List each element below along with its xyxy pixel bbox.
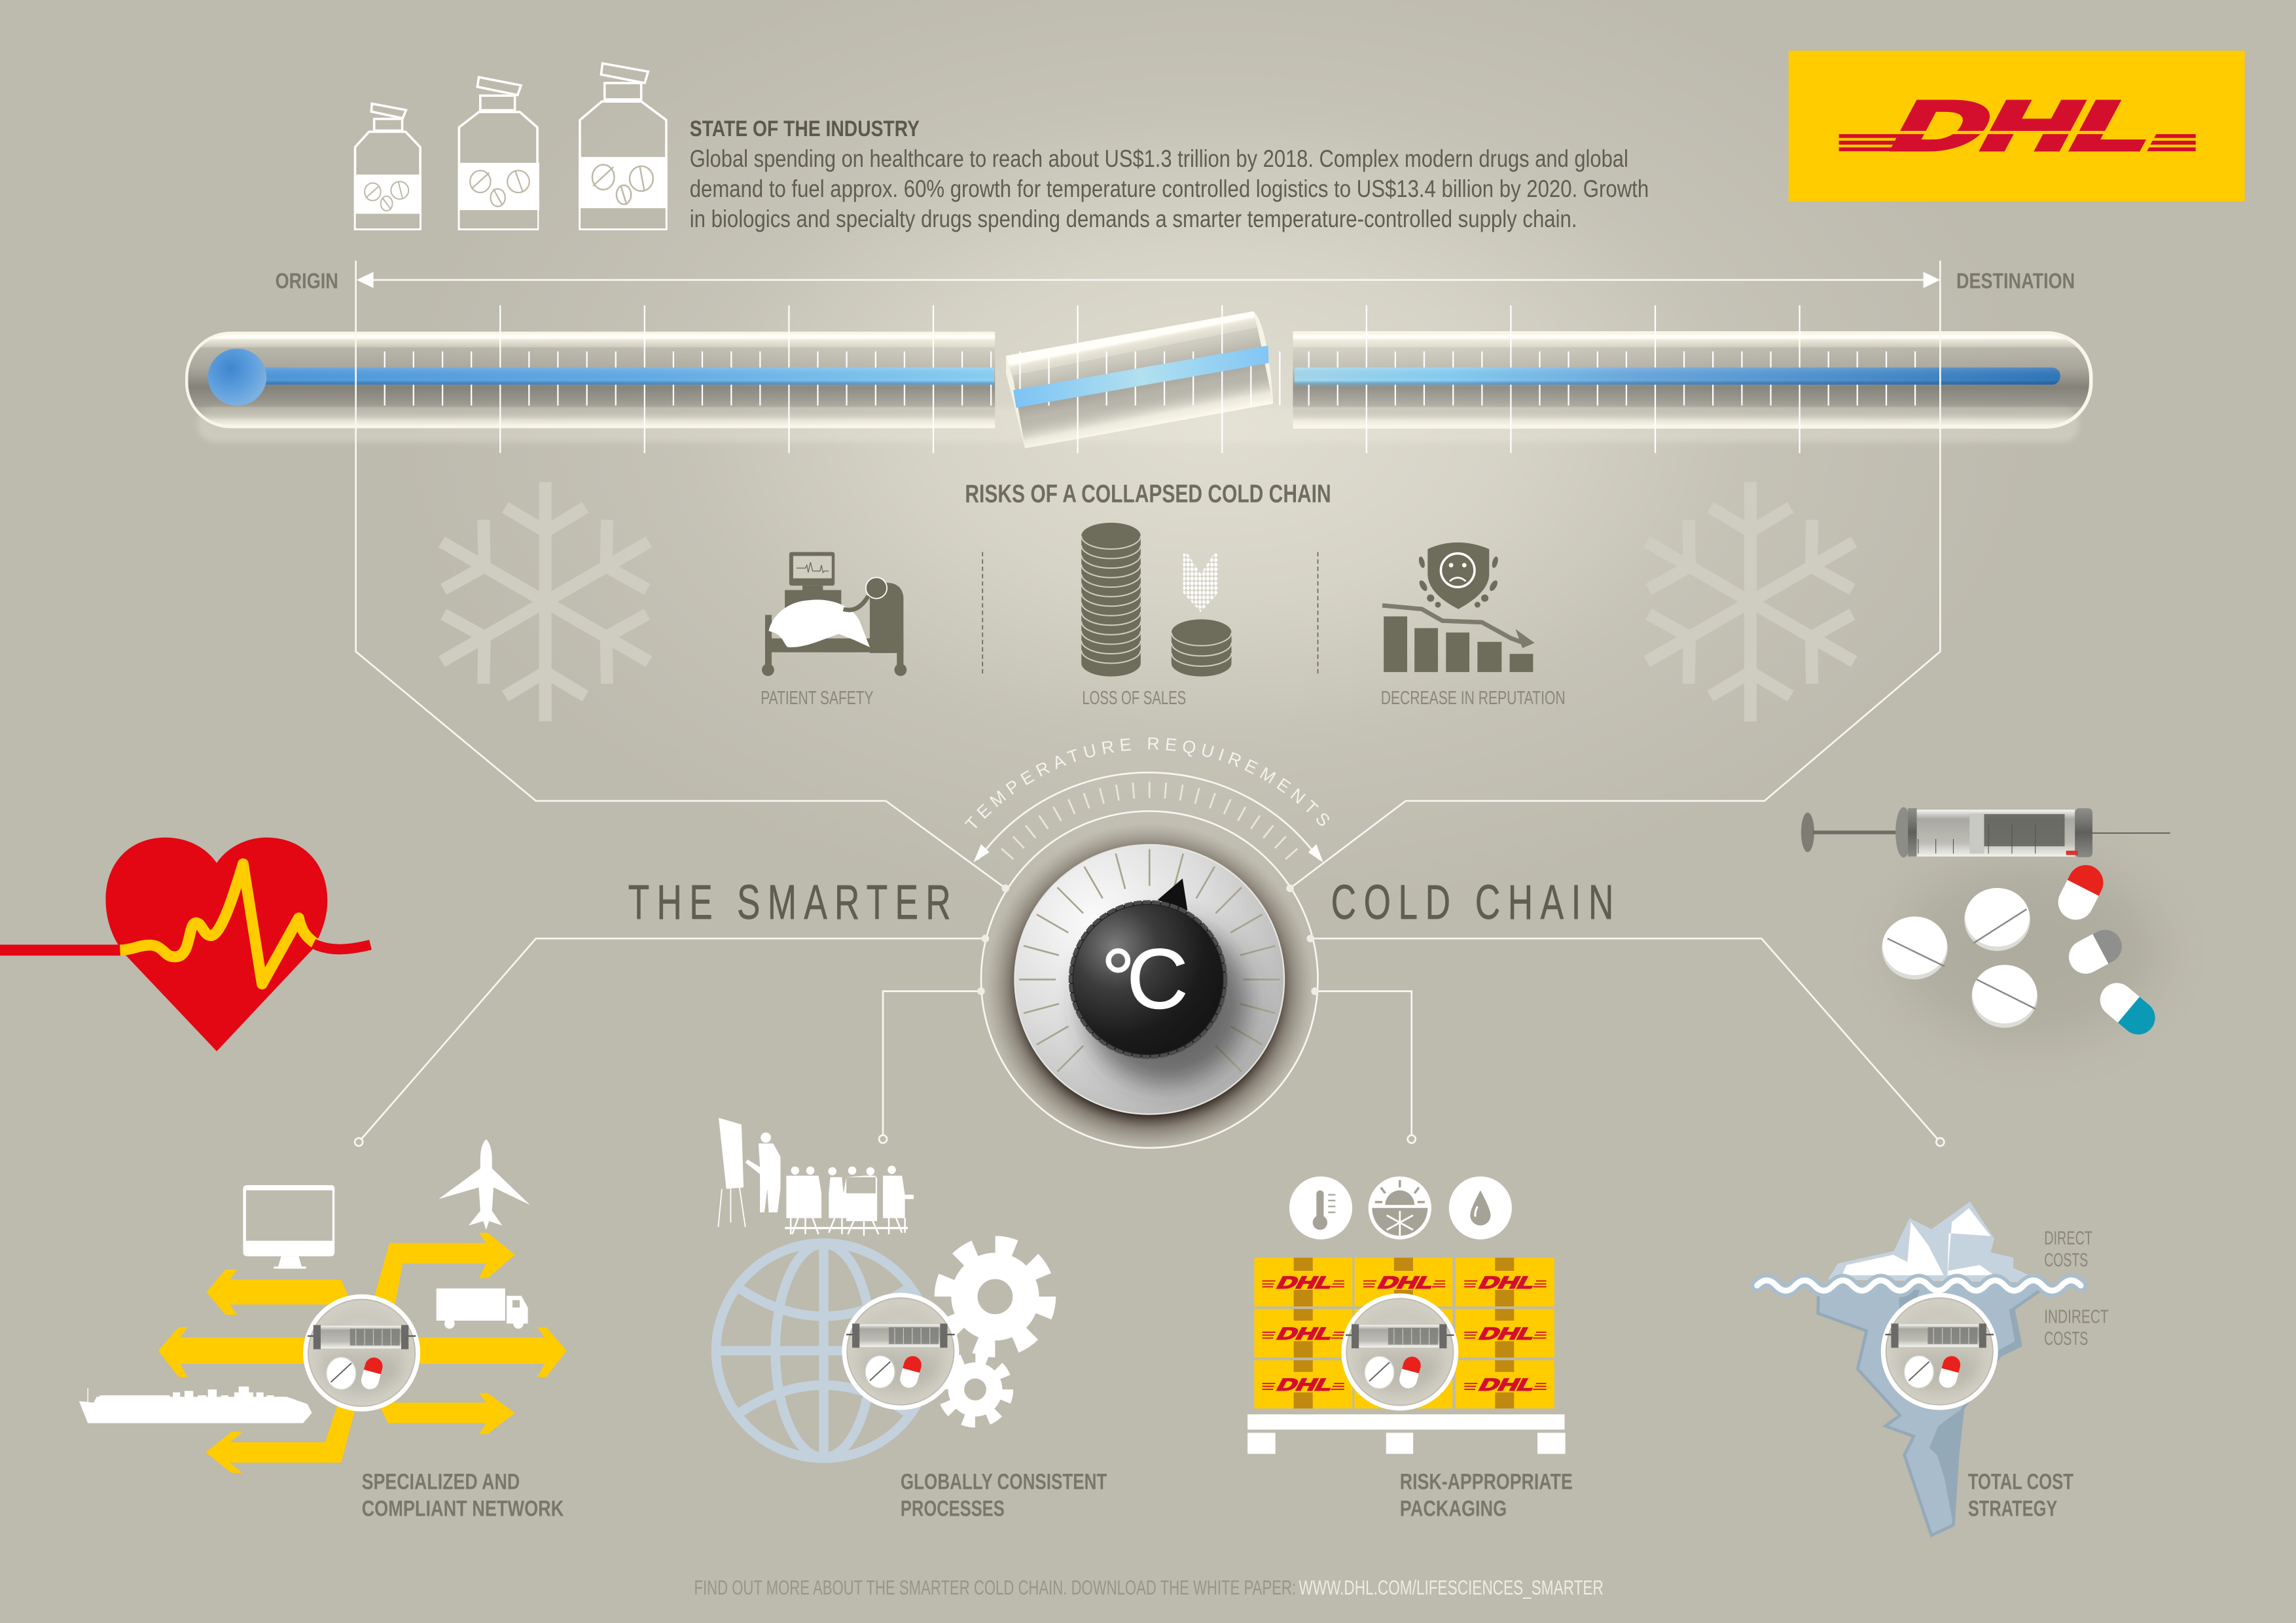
arc text: temperature requirements: TEMPERATURE REQUIREMENTS [965,737,1329,829]
box logos: DHL [1274,1324,1338,1343]
body text: in biologics and specialty drugs spending demands a smarter temperature-controlled supply chain. [690,205,1577,232]
iceberg below water [1818,1285,2047,1535]
label: indirect costs: COSTS [2044,1329,2088,1349]
illustration: syringe and pills [1801,807,2170,1043]
scale ticks [385,305,1915,453]
badge [842,1293,959,1410]
panel: globally consistent processes [716,1118,1107,1522]
body text [690,145,1649,232]
label: risk-appropriate packaging: RISK-APPROPRIATE [1400,1469,1573,1494]
title: cold chain: COLD CHAIN [1331,875,1613,929]
short coin stack [1172,619,1232,677]
footer: FIND OUT MORE ABOUT THE SMARTER COLD CHAIN. DOWNLOAD THE WHITE PAPER: [694,1576,1296,1599]
dial disc [1014,845,1284,1115]
box logos: DHL [1274,1375,1338,1394]
capsule teal [2093,976,2162,1041]
icon: patient safety [762,552,906,676]
tablet left [1882,917,1948,980]
badge [303,1294,420,1412]
icon: container ship [79,1387,312,1423]
dial shadow [986,823,1314,1150]
temperature dial [965,737,1329,1149]
pulse line right [314,944,370,950]
box logos [1263,1273,1547,1394]
label: risk-appropriate packaging [1400,1469,1573,1522]
ECG yellow line [120,864,315,984]
pallet [1247,1414,1566,1454]
celsius symbol: °C [1101,932,1188,1026]
icon: small gear [944,1359,1006,1420]
tall coin stack [1081,523,1141,677]
bottle small [355,103,420,229]
syringe [1801,807,2170,857]
tape [1294,1258,1514,1408]
footer: WWW.DHL.COM/LIFESCIENCES_SMARTER [1299,1576,1604,1599]
label: globally consistent processes: GLOBALLY CONSISTENT [901,1469,1107,1494]
label: indirect costs: INDIRECT [2044,1307,2109,1328]
bottle large [580,63,666,229]
heading: risks: RISKS OF A COLLAPSED COLD CHAIN [965,479,1331,508]
icon: decrease in reputation [1382,543,1533,672]
label: direct costs: COSTS [2044,1250,2088,1271]
yellow arrows [158,1233,567,1473]
fluid column left [258,368,994,385]
fluid column right [1295,368,2060,385]
icon: meeting silhouette [718,1118,914,1236]
label: specialized and compliant network: SPECIALIZED AND [362,1469,520,1494]
pointer [1158,878,1187,911]
connector lines lower [355,938,1944,1146]
label: specialized and compliant network [362,1469,564,1522]
tablet top [1964,888,2030,951]
capsule red [2052,859,2109,926]
disc ticks [1019,849,1280,1072]
boxes [1254,1258,1554,1408]
label: indirect costs [2044,1307,2109,1349]
box logos: DHL [1374,1273,1439,1292]
thermometer [187,305,2091,453]
label: patient safety: PATIENT SAFETY [761,688,874,709]
iceberg above water [1828,1202,2045,1283]
tube left segment [185,331,995,428]
logo wordmark [1839,87,2196,164]
table shadow [1896,861,2160,1043]
icon: loss of sales [1081,523,1232,677]
label: risk-appropriate packaging: PACKAGING [1400,1497,1507,1522]
icon: thermometer [1289,1177,1352,1240]
icon: airplane [439,1139,530,1230]
bottle medium [459,77,538,229]
icon: sun and snow [1369,1177,1431,1240]
body text: Global spending on healthcare to reach about US$1.3 trillion by 2018. Complex modern drugs and global [690,145,1628,172]
box logos: DHL [1475,1324,1540,1343]
label: globally consistent processes [901,1469,1107,1522]
icon: water drop [1449,1177,1512,1240]
icon: truck [437,1289,528,1329]
panel: total cost strategy [1757,1202,2109,1535]
label: loss of sales: LOSS OF SALES [1082,688,1186,709]
label: decrease in reputation: DECREASE IN REPUTATION [1381,688,1566,709]
icon: three medicine bottles [355,63,666,229]
badge [1881,1293,1998,1410]
capsule grey [2063,924,2128,980]
knob [1069,901,1227,1058]
divider [982,552,1318,673]
panel: risk-appropriate packaging [1247,1177,1573,1522]
title: the smarter: THE SMARTER [628,875,951,929]
line frame upper [356,260,1940,888]
iceberg shaded faces [1899,1290,2020,1525]
label: total cost strategy: TOTAL COST [1968,1469,2073,1494]
icon: snowflake right [1626,482,1874,721]
tube right segment [1293,331,2093,429]
water waves [1757,1280,2081,1291]
box logos: DHL [1475,1375,1540,1394]
ring junction dots [977,885,1319,995]
icon: globe [716,1243,931,1458]
temperature scale ticks [1001,782,1297,859]
tablet bottom [1971,965,2037,1028]
label: globally consistent processes: PROCESSES [901,1497,1005,1522]
label: origin: ORIGIN [276,270,338,294]
pallet of boxes [1247,1258,1566,1454]
thermometer bulb [208,349,266,406]
shield with sad face [1418,543,1499,609]
icon: large gear [944,1245,1047,1348]
outer ring [981,811,1318,1148]
fluid column middle [1013,346,1269,408]
declining trend arrow [1382,605,1527,644]
panel: specialized and compliant network [79,1139,567,1522]
label: total cost strategy: STRATEGY [1968,1497,2057,1522]
badge [1341,1293,1458,1410]
arrow: origin to destination [357,272,1940,288]
logo wordmark: DHL [1878,87,2174,164]
label: specialized and compliant network: COMPLIANT NETWORK [362,1497,564,1522]
dotted down arrow [1183,554,1218,612]
heading: STATE OF THE INDUSTRY [690,116,920,141]
arrow arc [973,772,1323,863]
body text: demand to fuel approx. 60% growth for temperature controlled logistics to US$13.4 billion by 2020. Growth [690,175,1649,202]
icon: heart with ECG [0,838,370,1051]
label: direct costs [2044,1228,2092,1271]
knob shadow [1084,921,1247,1085]
text block: state of the industry [690,116,1649,232]
pulse line left [0,944,122,955]
box logos: DHL [1475,1273,1540,1292]
water waves highlight [1757,1280,2081,1291]
tube broken middle segment [1006,312,1273,448]
label: total cost strategy [1968,1469,2073,1522]
icon: computer monitor [243,1185,334,1269]
tube shadow [198,407,2079,442]
iceberg highlights [1842,1208,1994,1275]
heart [106,838,327,1051]
label: destination: DESTINATION [1956,270,2075,294]
bar chart declining [1384,616,1533,672]
label: direct costs: DIRECT [2044,1228,2092,1249]
box logos: DHL [1274,1273,1338,1292]
panel: DHL logo [1789,50,2245,202]
icon: snowflake left [422,482,669,721]
